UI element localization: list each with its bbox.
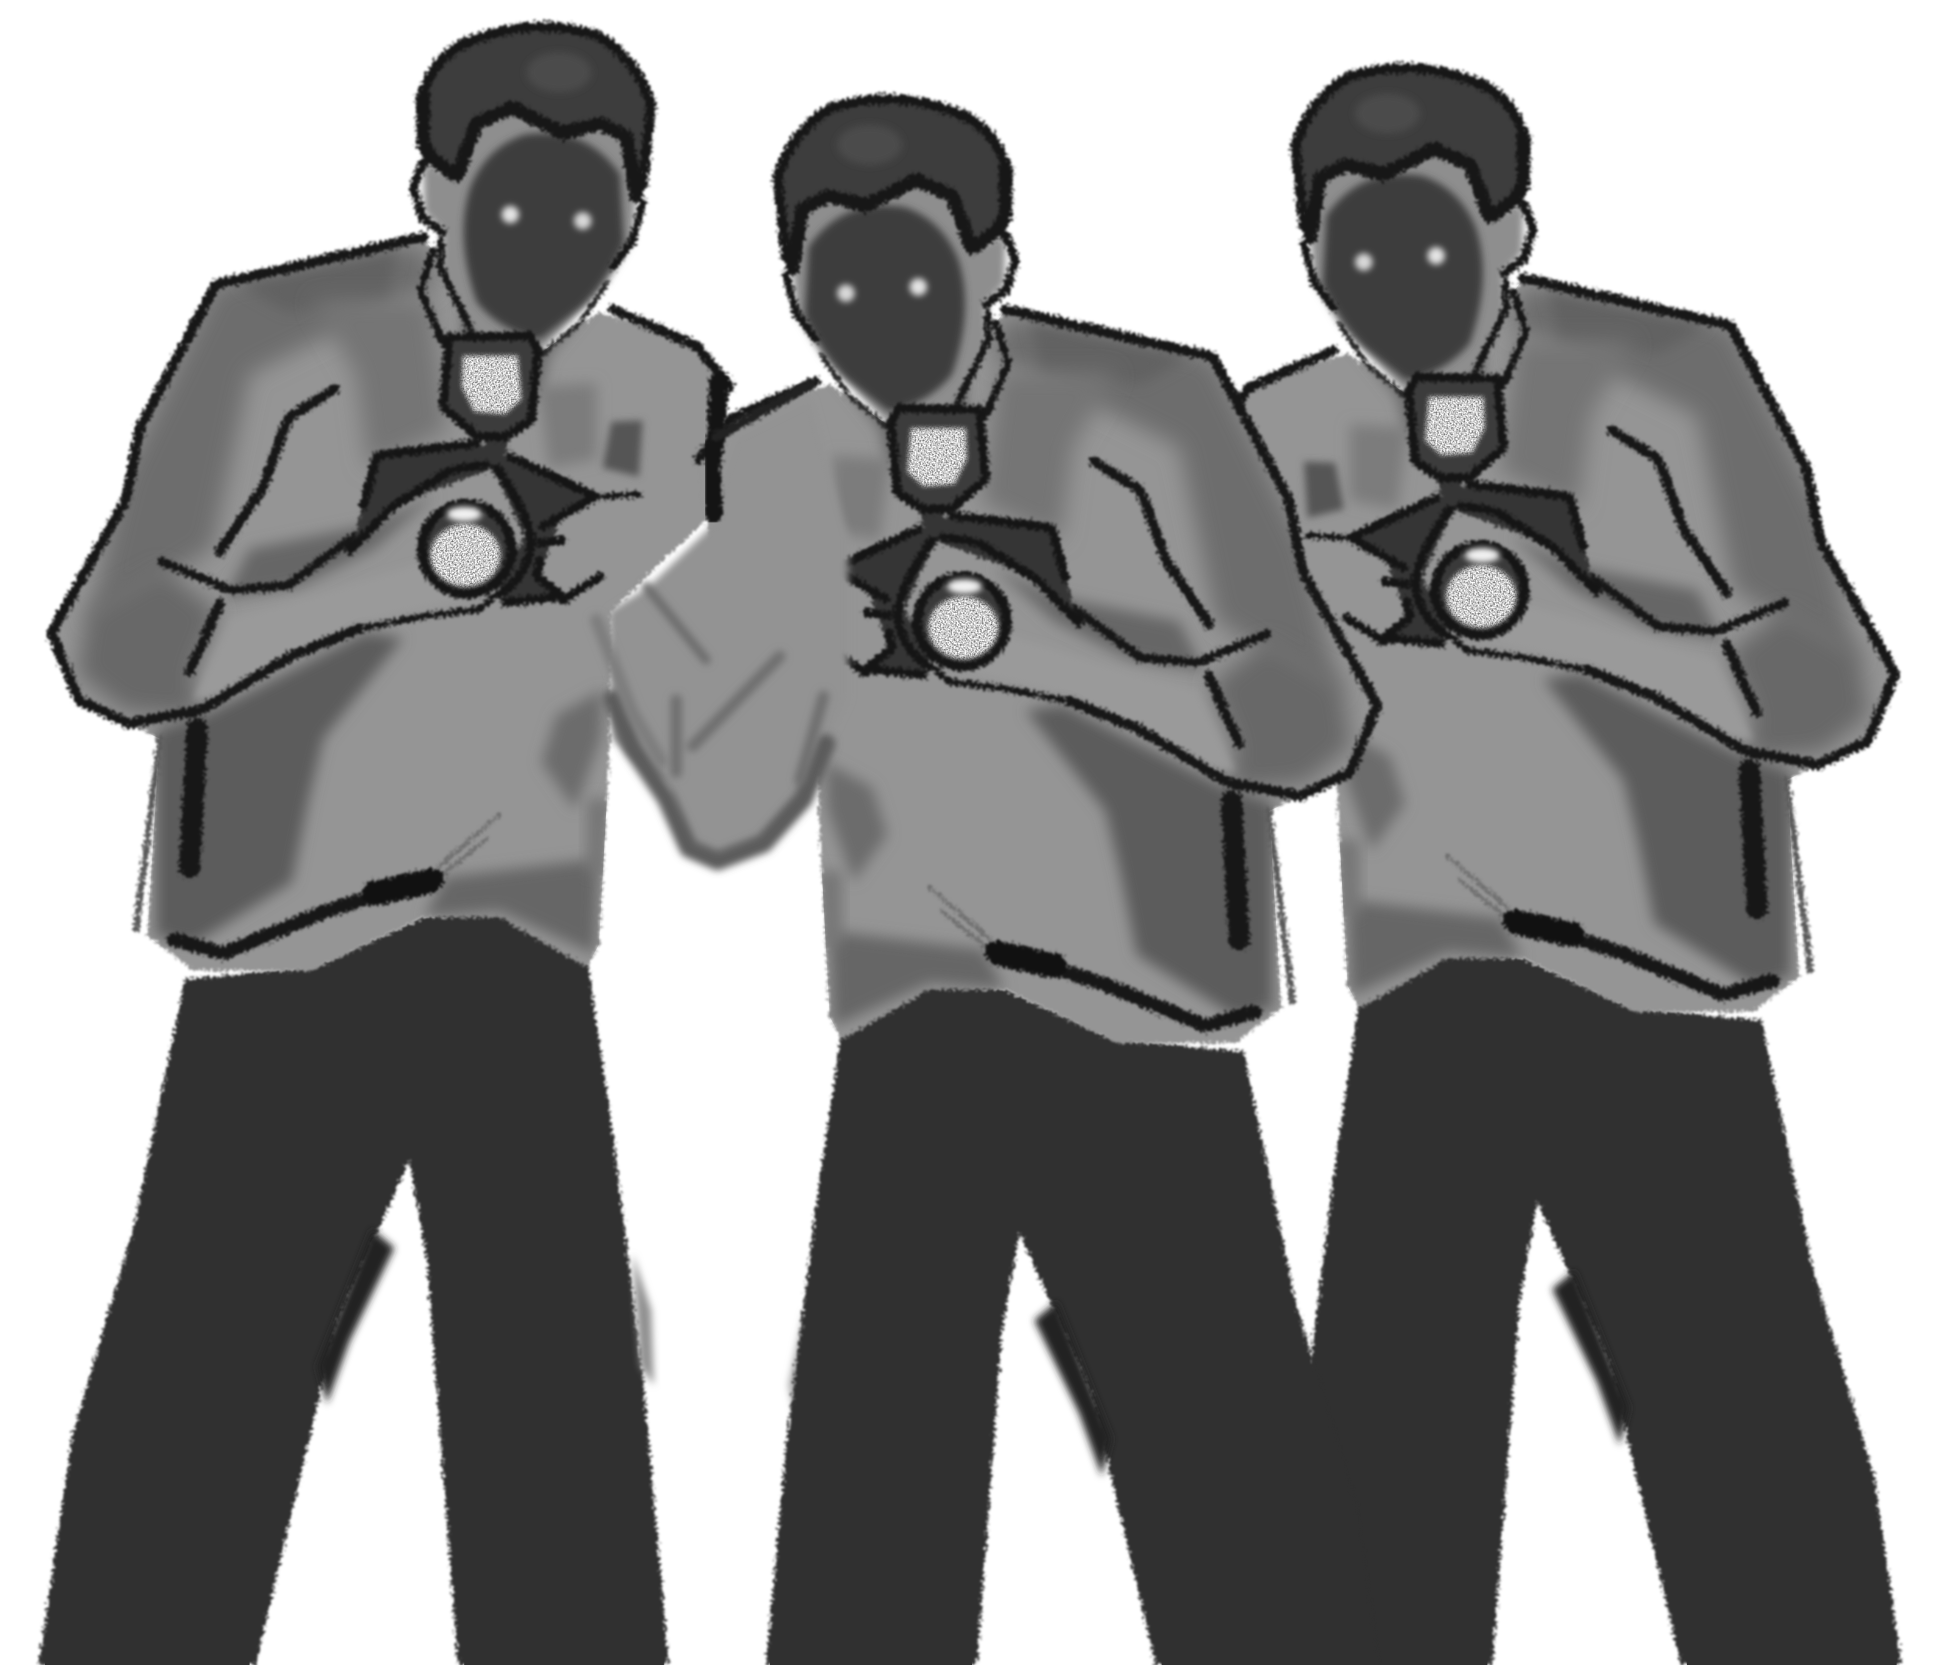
leg shadow behind the centre photographer xyxy=(789,1310,817,1435)
figure: right photographer xyxy=(1217,68,1902,1665)
left photographer's arm outline and centre shoulder xyxy=(711,381,810,514)
raised arm of the centre photographer xyxy=(596,399,848,861)
leg shadow behind the left photographer xyxy=(633,1254,654,1385)
figure: centre photographer xyxy=(596,99,1379,1665)
figure: left photographer xyxy=(39,27,730,1665)
